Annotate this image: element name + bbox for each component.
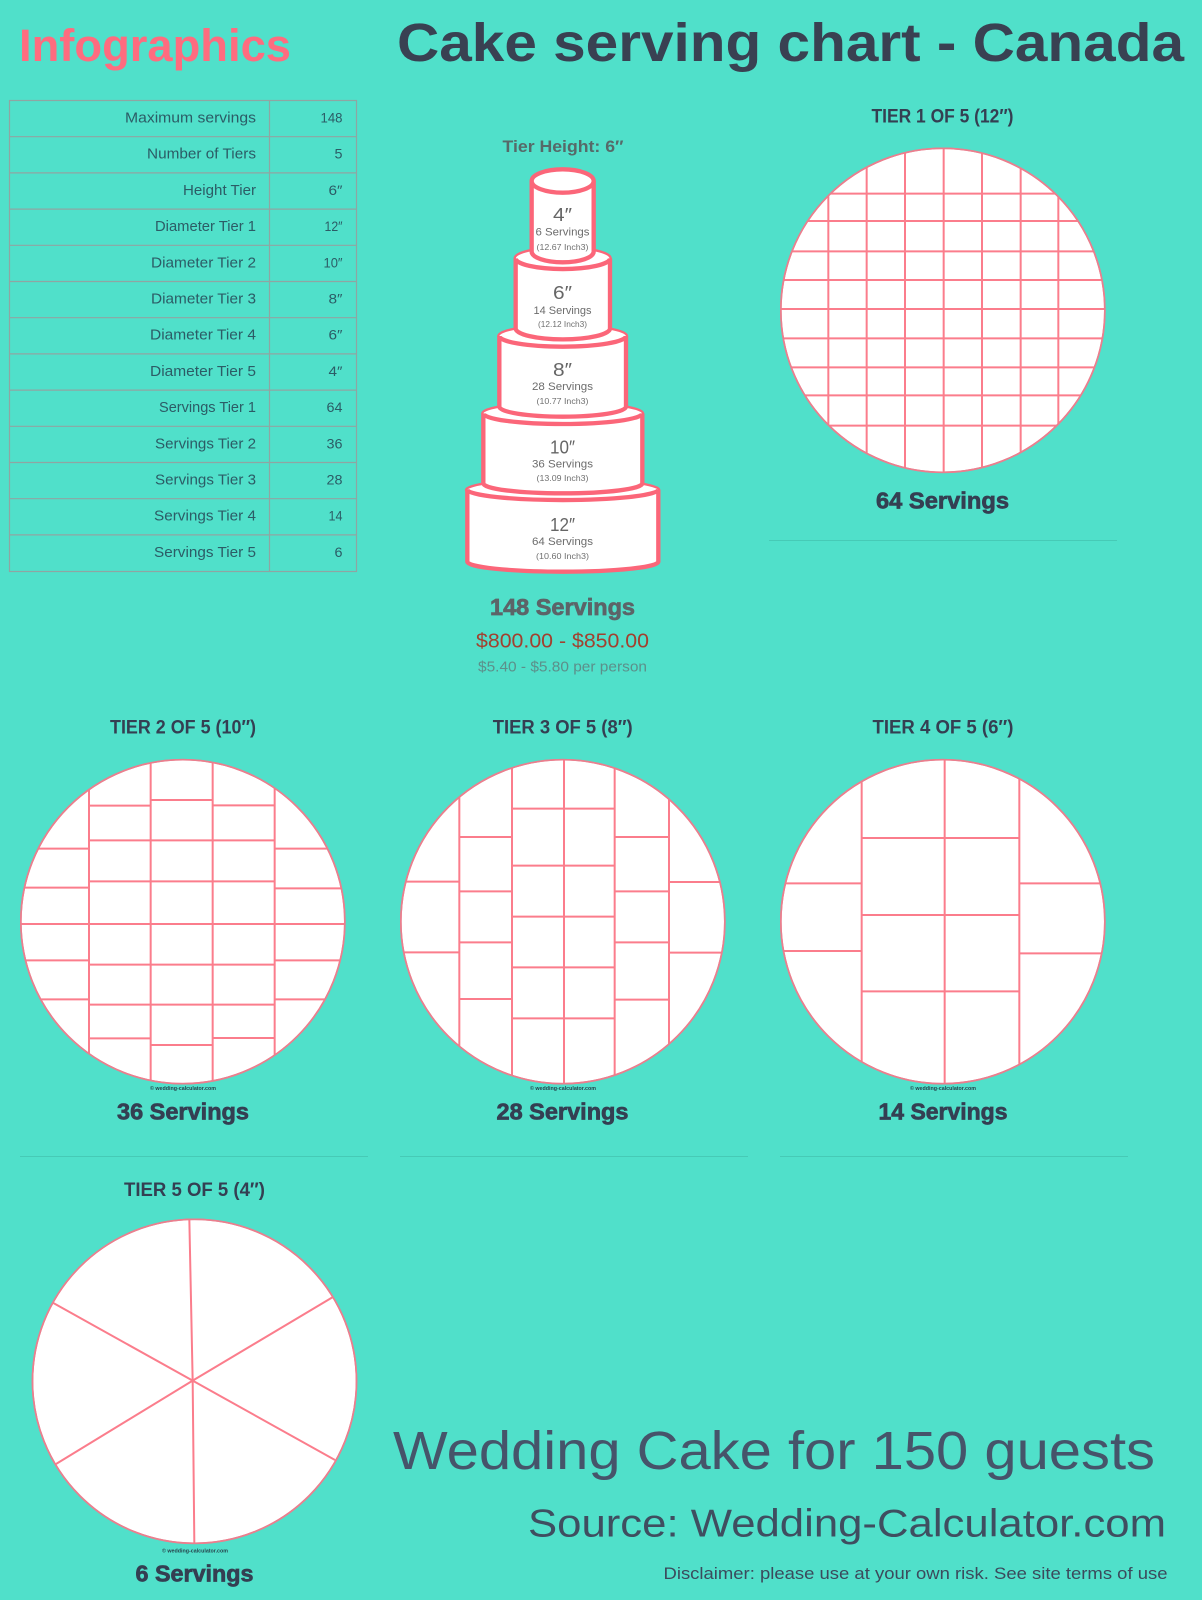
panel: tiered cake overview [466, 137, 659, 676]
cake labels: tier 5 [536, 205, 590, 252]
total servings: 148 Servings [490, 594, 635, 620]
cake labels: tier 1: 64 Servings [532, 536, 594, 548]
cake labels: tier 4: (12.12 Inch3) [538, 319, 587, 329]
table: cake specification: 36 [326, 436, 342, 451]
brand heading: Infographics: Infographics [19, 20, 291, 71]
cake labels: tier 5: 6 Servings [536, 227, 590, 239]
tier 3 servings: 28 Servings [496, 1098, 628, 1124]
panel: tier 1 [780, 108, 1106, 514]
tier 1 servings: 64 Servings [876, 487, 1009, 513]
tier 4 heading: TIER 4 OF 5 (6″) [872, 717, 1014, 738]
table: cake specification: 6 [334, 545, 342, 560]
cake labels: tier 2: 10″ [550, 437, 576, 457]
table: cake specification: 5 [334, 147, 342, 162]
title: Cake serving chart - Canada [397, 13, 1185, 73]
tier 4 servings: 14 Servings [878, 1098, 1008, 1124]
table: cake specification: 8″ [328, 292, 343, 306]
disclaimer: Disclaimer: please use at your own risk. See site terms of use [664, 1564, 1168, 1583]
table: cake specification: 12″ [324, 219, 343, 234]
tier 3 watermark: © wedding-calculator.com [530, 1085, 596, 1092]
cake labels: tier 2: (13.09 Inch3) [536, 473, 589, 483]
table: cake specification: 6″ [328, 183, 343, 198]
tier 1 cutting diagram [780, 148, 1106, 474]
table: cake specification: 28 [326, 472, 342, 488]
source line: Source: Wedding-Calculator.com [528, 1503, 1166, 1546]
table: cake specification: 10″ [324, 255, 343, 270]
tier 4 watermark: © wedding-calculator.com [910, 1085, 976, 1092]
table: cake specification: Diameter Tier 3 [151, 292, 256, 308]
cake labels: tier 3: 28 Servings [532, 381, 594, 393]
tier 2 cutting diagram [20, 758, 346, 1084]
table: cake specification: Maximum servings [125, 110, 256, 126]
cake labels: tier 3 [532, 360, 594, 406]
table: cake specification: Servings Tier 1 [159, 400, 256, 416]
panel: tier 5 [32, 1180, 356, 1587]
cake labels: tier 1 [532, 515, 594, 561]
tier 4 cutting diagram [780, 758, 1106, 1084]
panel: tier 3 [400, 720, 726, 1125]
cake labels: tier 4: 6″ [553, 283, 573, 303]
table: cake specification: Number of Tiers [147, 147, 256, 163]
table: cake specification: 4″ [328, 364, 343, 379]
tier 5 watermark: © wedding-calculator.com [162, 1548, 228, 1555]
table: cake specification: Servings Tier 4 [154, 509, 256, 525]
table: cake specification: Servings Tier 2 [155, 436, 256, 452]
cake labels: tier 2: 36 Servings [532, 458, 594, 470]
caption: wedding cake guests: Wedding Cake for 150 guests [393, 1421, 1155, 1481]
tier height label: Tier Height: 6″ [502, 137, 624, 156]
tier 1 heading: TIER 1 OF 5 (12″) [872, 106, 1014, 127]
cake labels: tier 1: 12″ [550, 515, 576, 535]
tier 2 servings: 36 Servings [117, 1098, 249, 1124]
table: cake specification: 148 [320, 110, 342, 126]
cake labels: tier 4 [534, 283, 592, 329]
tier 3 heading: TIER 3 OF 5 (8″) [493, 717, 633, 738]
table: cake specification [10, 100, 356, 572]
cake labels: tier 2 [532, 437, 594, 483]
cake labels: tier 3: 8″ [553, 360, 573, 380]
table: cake specification: Servings Tier 3 [155, 472, 256, 488]
cake labels: tier 4: 14 Servings [534, 305, 592, 317]
price per person: $5.40 - $5.80 per person [478, 659, 647, 676]
cake labels: tier 5: (12.67 Inch3) [536, 242, 589, 252]
cake labels: tier 5: 4″ [553, 205, 573, 225]
table: cake specification: Diameter Tier 5 [150, 364, 256, 380]
tier 2 watermark: © wedding-calculator.com [150, 1085, 216, 1092]
cake labels: tier 1: (10.60 Inch3) [536, 551, 589, 561]
tier 5 heading: TIER 5 OF 5 (4″) [124, 1180, 265, 1201]
table: cake specification: 64 [326, 400, 343, 415]
table: cake specification: Height Tier [183, 183, 256, 199]
table: cake specification: Servings Tier 5 [154, 545, 256, 561]
panel: tier 4 [780, 720, 1106, 1125]
tier 2 heading: TIER 2 OF 5 (10″) [110, 717, 256, 738]
panel: tier 2 [20, 720, 346, 1125]
tier 5 servings: 6 Servings [136, 1561, 254, 1587]
price range: $800.00 - $850.00 [476, 630, 649, 652]
table: cake specification: 6″ [328, 328, 343, 343]
tier 5 cutting diagram [32, 1219, 356, 1543]
table: cake specification: Diameter Tier 4 [150, 328, 256, 344]
table: cake specification: 14 [328, 509, 343, 524]
cake illustration [466, 169, 659, 572]
table: cake specification: Diameter Tier 1 [155, 219, 256, 235]
cake labels: tier 3: (10.77 Inch3) [536, 396, 589, 406]
tier 3 cutting diagram [400, 758, 726, 1084]
table: cake specification: Diameter Tier 2 [151, 255, 256, 271]
